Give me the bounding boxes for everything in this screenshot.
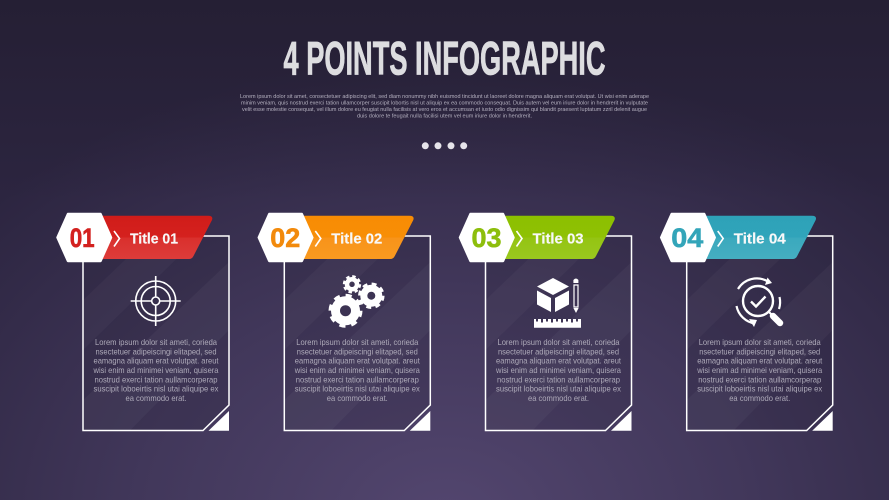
body text 03 xyxy=(495,338,622,403)
body text 01: eamagna aliquam erat volutpat. areut xyxy=(94,357,219,366)
banner 04 xyxy=(702,216,816,259)
body text 04: suscipit loboeirtis nisl utai aliquipe ex xyxy=(697,385,822,394)
body text 01: wisi enim ad minimei veniam, quisera xyxy=(93,366,219,375)
body text 02: nsectetuer adipeiscingi elitaped, sed xyxy=(297,347,418,356)
body text 03: Lorem ipsum dolor sit ameti, corieda xyxy=(498,338,620,347)
number 03: 03 xyxy=(472,223,502,253)
banner 02 xyxy=(299,216,414,259)
pagination dots xyxy=(422,142,467,149)
icon: cube, pencil and ruler xyxy=(534,278,581,328)
banner 01 xyxy=(98,216,212,259)
chevron 01 xyxy=(114,231,120,246)
number 02: 02 xyxy=(270,223,300,253)
body text 04 xyxy=(696,338,823,403)
body text 01: suscipit loboeirtis nisl utai aliquipe ex xyxy=(94,385,218,394)
title 03: Title 03 xyxy=(532,230,584,248)
icon: magnifier with check xyxy=(736,278,780,327)
body text 04: Lorem ipsum dolor sit ameti, corieda xyxy=(699,338,821,347)
title: 4 POINTS INFOGRAPHIC xyxy=(284,32,606,84)
body text 02 xyxy=(294,338,420,403)
banner 03 xyxy=(500,216,615,259)
title 02: Title 02 xyxy=(331,230,382,248)
body text 02: ea commodo erat. xyxy=(327,394,388,403)
frame 01 xyxy=(83,236,229,431)
body text 03: ea commodo erat. xyxy=(528,394,589,403)
body text 03: suscipit loboeirtis nisl utai aliquipe ex xyxy=(496,385,621,394)
frame 03 xyxy=(486,236,632,431)
frame 02 xyxy=(284,236,430,431)
chevron 04 xyxy=(718,231,723,246)
body text 01: Lorem ipsum dolor sit ameti, corieda xyxy=(95,338,217,347)
intro text block: Lorem ipsum dolor sit amet, consectetuer adipiscing elit, sed diam nonummy nibh euismod tincidunt ut laoreet dolore magna aliquam erat volutpat. Ut wisi enim aderape xyxy=(240,94,649,100)
hexagon badge 01 xyxy=(58,214,111,261)
icon: target xyxy=(131,276,181,326)
number 04: 04 xyxy=(671,223,703,253)
body text 02: wisi enim ad minimei veniam, quisera xyxy=(294,366,420,375)
chevron 02 xyxy=(315,231,321,246)
body text 02: Lorem ipsum dolor sit ameti, corieda xyxy=(296,338,419,347)
body text 04: nsectetuer adipeiscingi elitaped, sed xyxy=(699,347,821,356)
intro text block: duis dolore te feugait nulla facilisi utem vel eum iriure dolor in hendrerit. xyxy=(357,114,532,120)
body text 03: eamagna aliquam erat volutpat. areut xyxy=(496,357,622,366)
body text 02: suscipit loboeirtis nisl utai aliquipe ex xyxy=(295,385,420,394)
body text 04: wisi enim ad minimei veniam, quisera xyxy=(696,366,823,375)
body text 01: nostrud exerci tation aullamcorperap xyxy=(94,375,218,384)
number 01: 01 xyxy=(70,223,95,253)
body text 01: nsectetuer adipeiscingi elitaped, sed xyxy=(96,347,217,356)
icon: gears xyxy=(330,276,383,326)
body text 01 xyxy=(93,338,219,403)
hexagon badge 02 xyxy=(259,214,312,261)
body text 02: nostrud exerci tation aullamcorperap xyxy=(296,375,419,384)
hexagon badge 04 xyxy=(661,214,715,261)
intro text block: velit esse molestie consequat, vel illum dolore eu feugiat nulla facilisis at vero eros et accumsan et iusto odio dignissim qui blandit praesent luptatum zzril delenit augue xyxy=(242,107,647,113)
body text 03: nsectetuer adipeiscingi elitaped, sed xyxy=(498,347,619,356)
intro text block: minim veniam, quis nostrud exerci tation ullamcorper suscipit lobortis nisl ut aliquip ex ea commodo consequat. Duis autem vel eum iriure dolor in hendrerit in vulputate xyxy=(241,100,648,106)
panel: point 03 xyxy=(460,214,632,431)
panel: point 04 xyxy=(661,214,833,431)
hexagon badge 03 xyxy=(460,214,514,261)
chevron 03 xyxy=(516,231,522,246)
title 04: Title 04 xyxy=(734,230,786,248)
panel: point 02 xyxy=(259,214,430,431)
body text 03: wisi enim ad minimei veniam, quisera xyxy=(495,366,621,375)
body text 04: nostrud exerci tation aullamcorperap xyxy=(698,375,822,384)
body text 04: eamagna aliquam erat volutpat. areut xyxy=(697,357,823,366)
body text 03: nostrud exerci tation aullamcorperap xyxy=(497,375,620,384)
body text 02: eamagna aliquam erat volutpat. areut xyxy=(295,357,420,366)
panel: point 01 xyxy=(58,214,229,431)
title 01: Title 01 xyxy=(130,230,178,248)
body text 01: ea commodo erat. xyxy=(126,394,186,403)
intro text block xyxy=(240,94,649,120)
body text 04: ea commodo erat. xyxy=(729,394,790,403)
frame 04 xyxy=(687,236,833,431)
